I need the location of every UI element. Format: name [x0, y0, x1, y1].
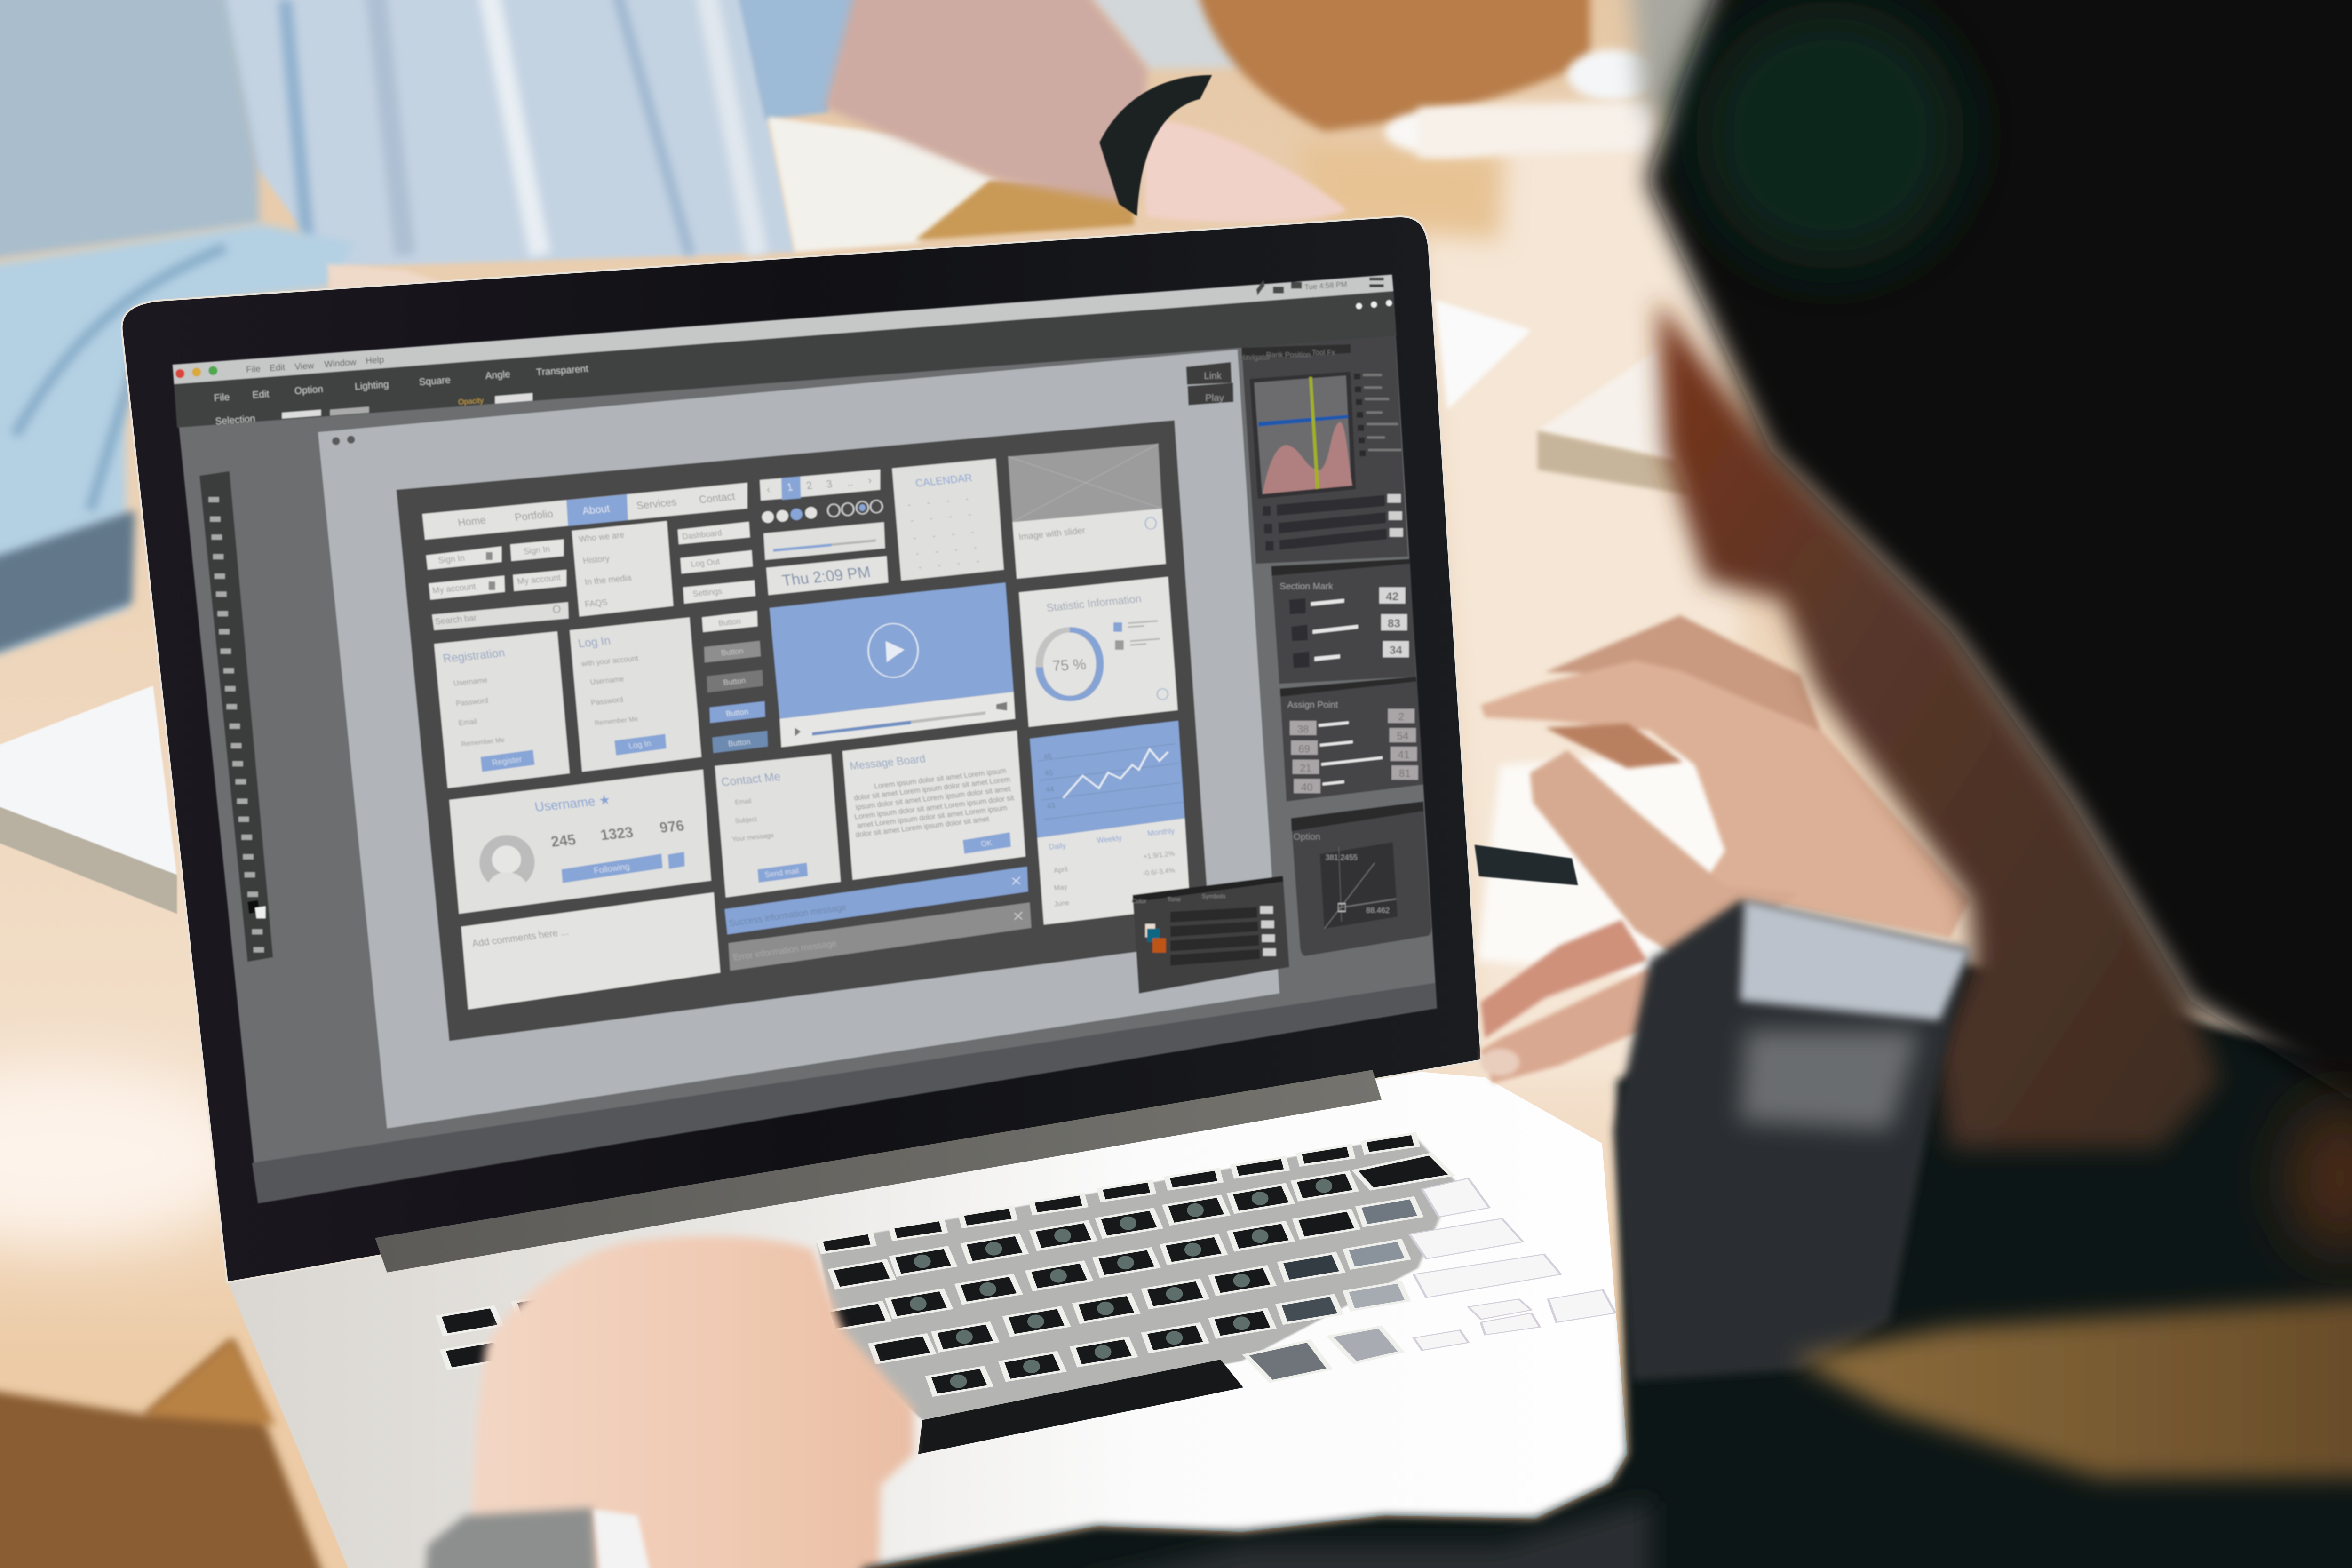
profile card: 976	[658, 817, 686, 836]
tablet right	[1436, 300, 1532, 410]
person's neck and face	[1658, 300, 2220, 1148]
navigator panel: Tool Fx	[1312, 349, 1335, 357]
lorem text lines: amet Lorem ipsum dolor sit amet Lorem ipsum	[856, 804, 1008, 830]
message board: OK	[980, 838, 993, 849]
keyboard	[438, 1134, 1615, 1454]
toolbar menu: Transparent	[536, 363, 589, 378]
navigation bar: Portfolio	[514, 508, 554, 523]
section mark panel	[1271, 559, 1416, 684]
error message bar: Error information message	[732, 939, 838, 963]
assign point panel: 2	[1398, 711, 1404, 723]
toolbar menu: Angle	[485, 369, 510, 382]
colour swatches	[1145, 924, 1166, 953]
registration form: Register	[491, 754, 523, 767]
dropdown menu: FAQS	[584, 597, 608, 609]
laptop lid bezel	[123, 217, 1480, 1281]
log in form: Log In	[577, 634, 612, 650]
canvas window dots	[332, 436, 355, 445]
menu labels: File	[246, 364, 261, 375]
link and play buttons: Play	[1205, 393, 1224, 403]
contact form	[715, 754, 841, 898]
shirt sleeve	[0, 223, 356, 668]
contact form: Send mail	[764, 866, 800, 879]
sign in buttons: My account	[431, 581, 477, 595]
dashboard, log out and settings buttons	[678, 522, 755, 604]
wristwatch foreground	[420, 1508, 600, 1568]
document canvas	[318, 350, 1279, 1128]
button stack: Button	[717, 617, 741, 628]
person's raised hand	[1480, 615, 1970, 1083]
search bar: Search bar	[434, 613, 477, 626]
line chart panel: 44	[1045, 785, 1055, 794]
shirt blue side	[729, 0, 877, 120]
assign point panel: 40	[1301, 781, 1313, 793]
sleeve folds	[15, 247, 225, 510]
status icons and clock: Tue 4:58 PM	[1304, 280, 1347, 292]
profile card: Username ★	[533, 792, 612, 814]
contact form: Email	[734, 797, 752, 806]
dashboard, log out and settings buttons: Dashboard	[681, 528, 723, 541]
wristwatch	[1099, 75, 1212, 216]
assign point panel: 54	[1397, 730, 1408, 742]
option panel: Option	[1294, 832, 1320, 842]
registration form: Username	[453, 676, 488, 688]
contact form: Your message	[731, 831, 774, 843]
dropdown menu: In the media	[584, 572, 633, 587]
menu labels: Window	[324, 358, 357, 370]
small colour panel: Tone	[1167, 896, 1181, 903]
pagination	[760, 470, 880, 501]
navigation bar: Home	[457, 514, 487, 529]
line chart panel: 43	[1046, 802, 1056, 811]
assign point panel: 38	[1297, 724, 1309, 735]
profile card: 245	[549, 831, 577, 850]
pale shirt at top	[1056, 0, 1245, 69]
small colour panel: Symbols	[1202, 893, 1226, 900]
contact form: Contact Me	[720, 770, 782, 789]
traffic lights	[175, 366, 217, 378]
assign point panel: 41	[1398, 749, 1410, 761]
comment box	[461, 892, 720, 1010]
image slider panel	[1008, 444, 1166, 579]
application toolbar	[174, 291, 1397, 428]
toolbar menu	[214, 363, 589, 404]
shirt stripes	[285, 0, 757, 255]
navigator panel: Navigator	[1240, 354, 1271, 362]
filled and ring dots	[762, 500, 882, 523]
clock panel: Thu 2:09 PM	[780, 564, 872, 589]
small colour panel: Color	[1131, 898, 1147, 905]
assign point panel: 81	[1399, 767, 1411, 779]
line chart panel: -0.6/-3.4%	[1142, 867, 1176, 877]
assign point panel: Assign Point	[1287, 700, 1338, 710]
sign in buttons: My account	[516, 572, 562, 586]
sleeve shadow	[0, 510, 135, 668]
table dark foreground edge	[0, 1338, 352, 1568]
line chart panel: 46	[1043, 752, 1053, 761]
pagination: ›	[867, 474, 873, 486]
error message bar	[729, 902, 1032, 971]
line chart panel: 45	[1044, 769, 1054, 778]
log in form	[570, 617, 701, 772]
left tool strip	[199, 471, 273, 962]
registration form: Password	[455, 697, 489, 708]
dropdown menu: History	[582, 553, 611, 565]
link and play buttons	[1186, 362, 1233, 405]
assign point panel	[1280, 677, 1423, 801]
book right spine	[1537, 430, 1691, 495]
laptop base	[228, 1068, 1628, 1568]
finger nail	[1480, 1049, 1519, 1076]
link and play buttons: Link	[1204, 371, 1222, 381]
small colour panel	[1131, 876, 1289, 994]
middle finger shade	[1545, 723, 1683, 768]
success message bar: Success information message	[728, 902, 848, 929]
dropdown menu: Who we are	[578, 529, 625, 544]
profile card: Following	[593, 861, 630, 876]
histogram sliders	[1263, 494, 1403, 551]
pagination: ..	[846, 476, 854, 488]
profile card	[449, 770, 711, 914]
toolbar menu: Square	[419, 374, 451, 388]
book right top	[1537, 350, 1676, 461]
screen	[173, 275, 1437, 1203]
keyboard well	[818, 1135, 1456, 1420]
white cloth top right	[1384, 110, 1510, 155]
comment box: Add comments here ...	[471, 926, 570, 949]
success message bar	[724, 867, 1028, 934]
dashboard, log out and settings buttons: Settings	[692, 586, 723, 598]
person's jacket foreground	[810, 960, 2352, 1568]
warm shadow right edge	[2288, 1103, 2352, 1253]
notebook left	[0, 686, 177, 878]
video player	[770, 582, 1015, 747]
table orange edge highlight	[144, 1338, 276, 1425]
option panel	[1291, 801, 1431, 956]
button stack: Button	[725, 707, 749, 718]
option panel: 381.2455	[1326, 853, 1358, 862]
person's typing hand	[472, 1236, 914, 1568]
histogram chart	[1250, 372, 1356, 499]
calendar panel: CALENDAR	[914, 472, 973, 489]
toolbar controls: Opacity	[458, 397, 484, 406]
progress panel	[763, 522, 885, 560]
line chart panel: May	[1053, 883, 1068, 892]
shoulder mid tone	[1740, 1031, 1920, 1130]
lorem text lines	[853, 767, 1015, 839]
lorem text lines: Lorem ipsum dolor sit amet Lorem ipsum	[874, 767, 1007, 791]
jacket lower highlight	[1050, 1500, 1650, 1568]
third finger	[1480, 920, 1647, 1038]
pale strip top right	[1417, 102, 1650, 158]
wood between arm and laptop	[915, 180, 1134, 240]
log in form: Password	[590, 696, 624, 707]
section mark panel: 42	[1386, 590, 1398, 603]
section mark panel: 83	[1388, 617, 1400, 630]
sign in buttons: Sign In	[437, 553, 466, 565]
key highlights	[910, 1179, 1332, 1388]
registration form: Remember Me	[461, 736, 505, 748]
second forearm	[1191, 0, 1590, 132]
menu bar icons	[1257, 279, 1384, 293]
option panel: 88.462	[1366, 906, 1390, 915]
navigation bar: About	[581, 502, 611, 517]
lorem text lines: dolor sit amet Lorem ipsum dolor sit amet	[855, 815, 990, 839]
button stack: Button	[727, 737, 751, 748]
pagination: 3	[825, 478, 833, 490]
clock panel	[766, 556, 888, 595]
toolbar menu: Edit	[252, 389, 270, 401]
little finger	[1480, 968, 1665, 1083]
blurred grey object behind cap	[1628, 0, 1755, 112]
board dark frame	[397, 420, 1211, 1041]
menu labels	[246, 355, 384, 375]
far finger	[1545, 615, 1822, 735]
toolbar controls	[282, 393, 532, 419]
tool icons	[208, 500, 264, 950]
table right side overexposed cream	[1410, 105, 1770, 1080]
back of hand and index finger	[1480, 660, 1970, 938]
dashboard, log out and settings buttons: Log Out	[690, 557, 721, 569]
key shapes	[438, 1134, 1452, 1395]
navigation bar: Services	[636, 496, 677, 512]
notebook pages edge	[0, 801, 177, 914]
statistics panel: Statistic Information	[1045, 592, 1142, 614]
line chart panel: June	[1054, 899, 1070, 908]
button stack	[702, 611, 768, 753]
laptop hinge	[375, 1070, 1382, 1273]
histogram legend	[1354, 375, 1401, 454]
line chart panel: +1.9/1.2%	[1143, 850, 1176, 861]
shoulder pale highlight	[1740, 900, 1970, 1020]
shirt left panel	[0, 0, 260, 264]
registration form: Registration	[442, 646, 506, 665]
search bar	[432, 602, 569, 630]
toolbar menu: Option	[294, 383, 324, 397]
pen	[1475, 845, 1578, 885]
line chart panel: Weekly	[1096, 833, 1123, 845]
second finger	[1530, 750, 1800, 968]
image slider panel: Image with slider	[1018, 525, 1087, 542]
menu labels: Edit	[269, 363, 286, 374]
lorem text lines: Lorem ipsum dolor sit amet Lorem ipsum dolor sit	[854, 794, 1015, 821]
sign in buttons: Sign In	[523, 544, 551, 556]
cup blurred top right	[1567, 49, 1658, 101]
white cloth beside arm	[768, 117, 999, 252]
profile card: 1323	[599, 823, 635, 844]
statistics panel	[1019, 577, 1178, 727]
log in form: Log In	[628, 739, 652, 750]
sign in buttons	[426, 539, 566, 600]
toolbar menu: File	[214, 391, 230, 404]
brown band lower right	[1793, 1299, 2352, 1478]
lorem text lines: dolor sit amet Lorem ipsum dolor sit amet Lorem	[853, 775, 1011, 802]
space bar	[918, 1360, 1243, 1454]
contact form: Subject	[734, 815, 757, 825]
navigator panel: Rank Position	[1266, 351, 1311, 359]
navigator panel	[1240, 335, 1408, 564]
line chart panel	[1030, 721, 1190, 925]
pagination: 1	[786, 481, 794, 493]
log in form: Username	[589, 675, 625, 686]
line chart panel: Daily	[1048, 841, 1067, 852]
calendar panel	[892, 459, 1004, 581]
person's dark hair and cap	[1647, 0, 2352, 1170]
log in form: with your account	[580, 654, 639, 668]
cap green tint	[1695, 0, 1965, 270]
button stack: Button	[720, 646, 744, 657]
mac menu bar	[173, 275, 1393, 384]
table left overexposed highlight	[0, 1066, 255, 1245]
registration form	[434, 631, 570, 788]
lorem text lines: ipsum dolor sit amet Lorem ipsum dolor sit amet	[855, 785, 1012, 812]
person forearm	[825, 0, 1147, 204]
shoulder dark base	[1614, 900, 1970, 1380]
hand under sleeve	[327, 264, 450, 291]
person shirt body	[210, 0, 795, 267]
selection label: Selection	[215, 413, 256, 427]
pagination: 2	[805, 479, 813, 492]
assign point panel: 21	[1300, 762, 1311, 774]
white paper behind hand	[1478, 750, 1755, 975]
line chart panel: Monthly	[1147, 826, 1176, 838]
navigation bar	[422, 483, 747, 540]
statistics panel: 75 %	[1052, 656, 1087, 674]
line chart panel: April	[1053, 865, 1068, 875]
UI kit board	[397, 420, 1211, 1041]
hand on table	[1143, 120, 1347, 222]
watch white highlight	[594, 1510, 667, 1568]
log in form: Remember Me	[594, 715, 639, 727]
section mark panel: 34	[1390, 644, 1402, 657]
pagination: ‹	[765, 484, 771, 495]
menu labels: View	[294, 361, 314, 372]
swatch sliders	[1170, 907, 1260, 966]
window dots	[1356, 300, 1392, 309]
message board: Message Board	[849, 752, 927, 772]
section mark panel: Section Mark	[1279, 581, 1333, 591]
navigation bar: Contact	[698, 490, 736, 506]
application background	[173, 275, 1437, 1203]
dropdown menu	[572, 521, 673, 617]
message board	[842, 731, 1025, 880]
pale keys right side	[1409, 1178, 1615, 1350]
toolbar menu: Lighting	[354, 379, 389, 392]
wood far table	[1296, 144, 1504, 240]
screen bottom dock strip	[252, 983, 1437, 1203]
registration form: Email	[458, 717, 477, 727]
right side panels	[1131, 279, 1431, 994]
button stack: Button	[723, 676, 747, 687]
menu labels: Help	[365, 355, 384, 366]
assign point panel: 69	[1298, 743, 1310, 755]
